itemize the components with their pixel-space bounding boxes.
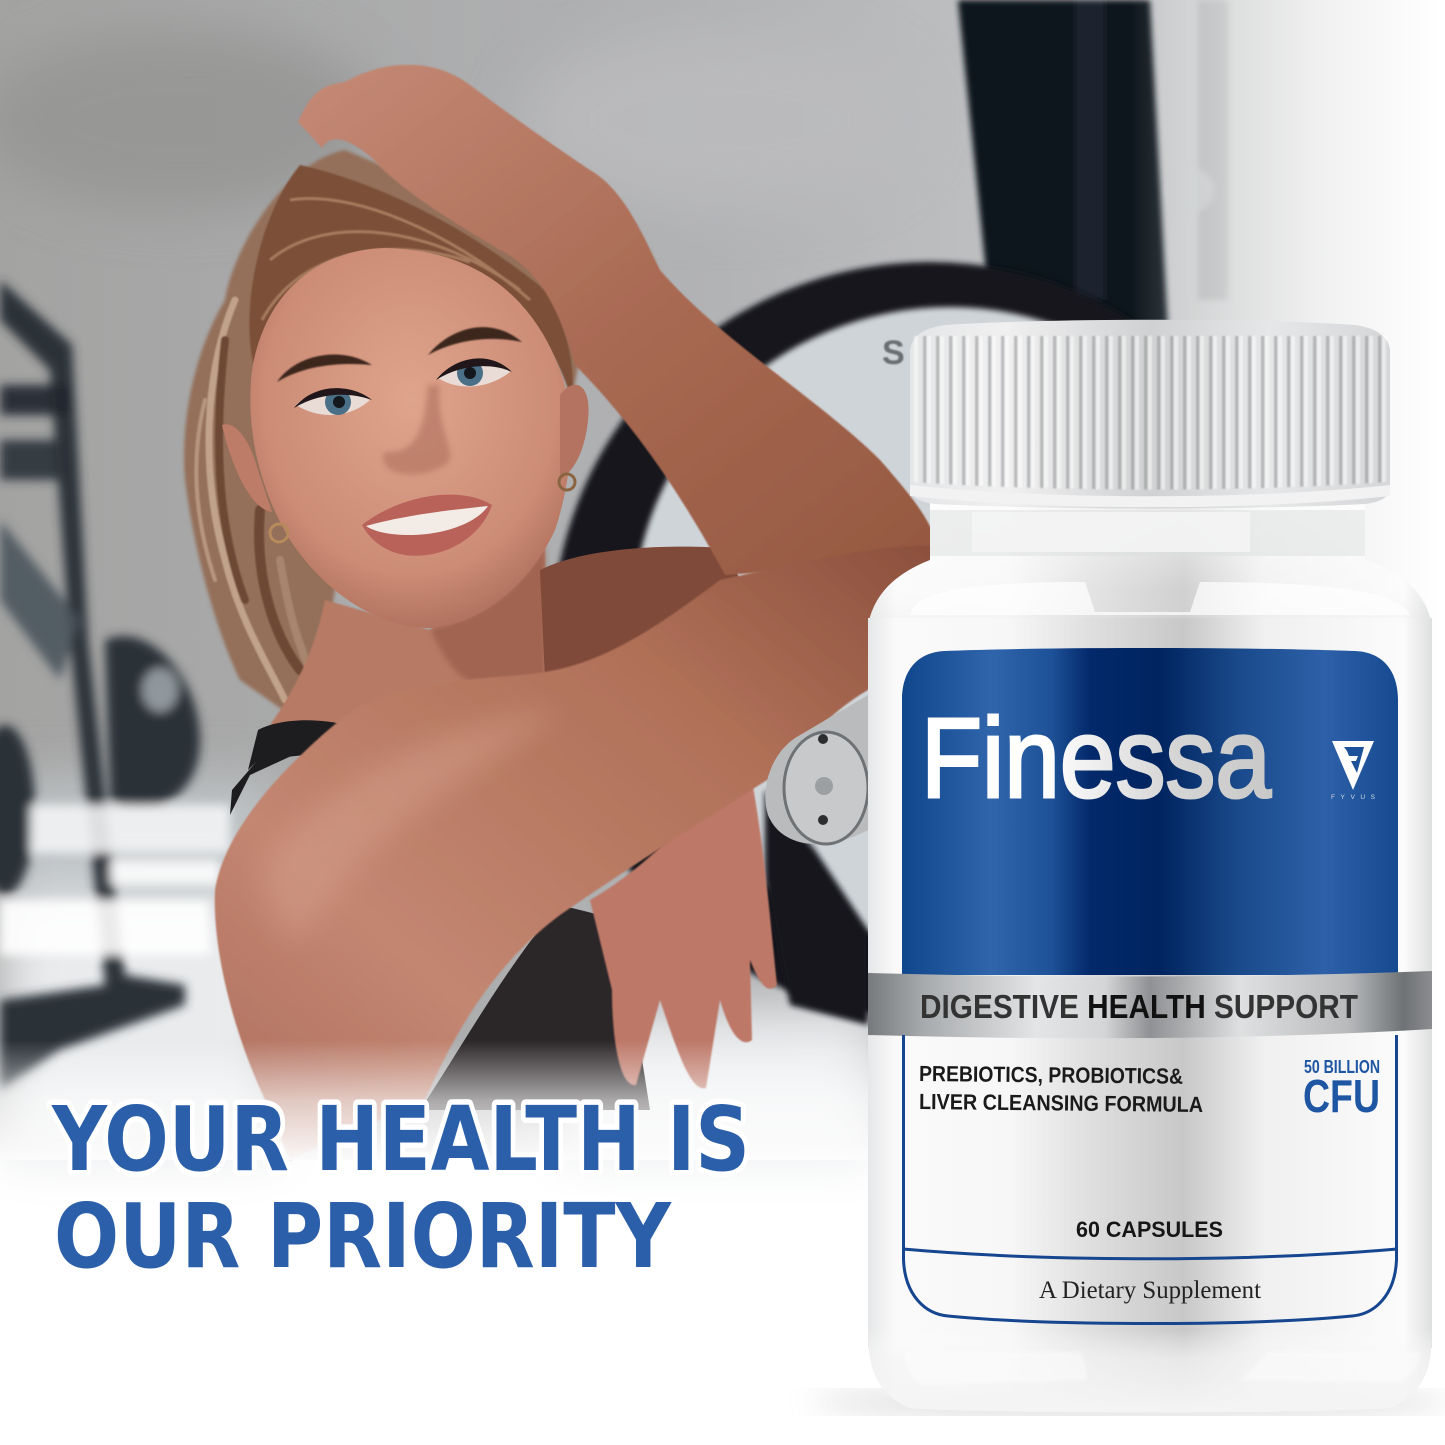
blue label panel xyxy=(902,648,1398,975)
background: black weight rack pole xyxy=(958,0,1228,330)
bottle base xyxy=(868,1330,1432,1412)
bottle body xyxy=(868,618,1432,1348)
woman: eyebrows xyxy=(277,327,522,382)
formula description xyxy=(919,1061,1203,1117)
background: weight plate xyxy=(552,262,1308,1025)
woman: chest shadow xyxy=(540,547,745,680)
silver band xyxy=(868,971,1432,1038)
barbell end cap xyxy=(765,695,868,844)
headline line 2: OUR PRIORITY xyxy=(54,1184,672,1288)
base highlight xyxy=(905,1352,1420,1385)
woman: smile xyxy=(362,495,492,556)
capsule count: 60 CAPSULES xyxy=(1076,1217,1223,1242)
headline line 1: YOUR HEALTH IS xyxy=(51,1087,750,1191)
CFU badge: 50 BILLION xyxy=(1304,1057,1380,1077)
product bottle xyxy=(810,320,1445,1412)
background: right side white fade xyxy=(1130,0,1445,1160)
brand name: Finessa xyxy=(921,695,1271,821)
brand logo xyxy=(1331,741,1376,801)
woman: dark sports top xyxy=(420,905,650,1110)
bottle neck and shoulder xyxy=(868,500,1432,650)
CFU badge: CFU xyxy=(1303,1070,1380,1122)
woman: lower hand and fingers xyxy=(590,770,777,1088)
formula description: LIVER CLEANSING FORMULA xyxy=(919,1089,1203,1117)
woman: front arm and shoulder xyxy=(215,545,938,1160)
woman: neck and chest xyxy=(270,545,545,730)
formula description: PREBIOTICS, PROBIOTICS& xyxy=(919,1061,1183,1089)
headline xyxy=(51,1087,750,1288)
woman: face xyxy=(250,248,571,628)
CFU badge xyxy=(1303,1057,1380,1122)
woman: nose shadow xyxy=(383,385,450,474)
woman: neck shadow xyxy=(430,545,545,682)
bottle shadow xyxy=(810,1392,1445,1412)
band text: DIGESTIVE HEALTH SUPPORT xyxy=(920,988,1358,1025)
woman: ear and earring xyxy=(222,385,589,542)
bottle cap xyxy=(910,320,1390,508)
woman: black top strap xyxy=(230,720,345,815)
woman: bottom fade into white xyxy=(0,1040,868,1160)
woman: raised arm and hand xyxy=(298,65,938,575)
woman: photographic figure xyxy=(0,65,938,1160)
background: weight plate: S xyxy=(882,334,905,372)
woman: eyes xyxy=(294,358,512,415)
woman: hair and ponytail xyxy=(184,150,590,715)
supplement note: A Dietary Supplement xyxy=(1039,1277,1261,1304)
label outline xyxy=(903,1035,1397,1324)
brand logo: FYVUS xyxy=(1331,794,1376,801)
woman: arm highlight xyxy=(260,710,560,938)
